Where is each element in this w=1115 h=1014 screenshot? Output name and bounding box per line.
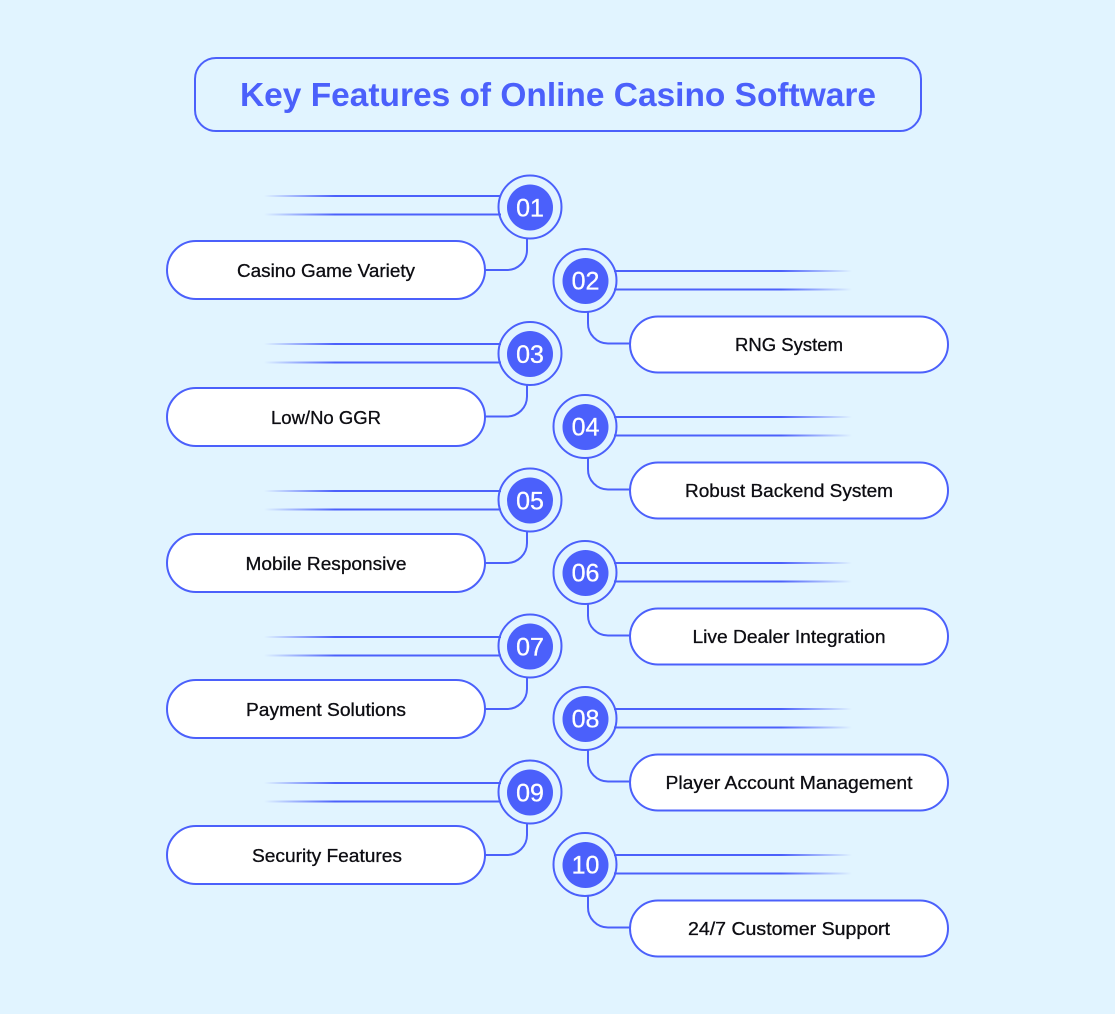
badge 07 — [498, 614, 562, 678]
badge 10 — [554, 833, 616, 896]
speed lines 02 — [614, 270, 852, 290]
feature 09 — [167, 760, 562, 884]
label 05 — [167, 534, 485, 592]
badge 03 — [498, 322, 562, 385]
badge 05: 05 — [516, 488, 544, 516]
badge 08 — [554, 687, 616, 750]
label 05: Mobile Responsive — [246, 554, 406, 574]
speed lines 09 — [264, 782, 501, 802]
label 01: Casino Game Variety — [237, 261, 415, 281]
label 10 — [630, 900, 948, 956]
feature 08 — [554, 687, 948, 810]
label 08: Player Account Management — [666, 773, 912, 793]
badge 09 — [498, 760, 562, 824]
label 09 — [167, 826, 485, 884]
label 02: RNG System — [735, 335, 843, 355]
connector 09 — [485, 824, 527, 855]
connector 02 — [588, 312, 630, 344]
feature 04 — [554, 395, 948, 518]
label 08 — [630, 754, 948, 810]
feature 07 — [167, 614, 562, 738]
label 07 — [167, 680, 485, 738]
feature 10 — [554, 833, 948, 956]
badge 02: 02 — [572, 268, 599, 296]
label 06: Live Dealer Integration — [692, 627, 886, 647]
connector 03 — [485, 386, 527, 416]
badge 04: 04 — [572, 414, 599, 442]
connector 06 — [588, 604, 630, 636]
feature 02 — [554, 249, 948, 372]
title — [195, 58, 921, 131]
speed lines 01 — [264, 195, 501, 216]
speed lines 10 — [614, 854, 852, 874]
connector 07 — [485, 678, 527, 709]
label 06 — [630, 608, 948, 664]
badge 02 — [554, 249, 616, 312]
badge 07: 07 — [516, 634, 544, 662]
label 10: 24/7 Customer Support — [688, 919, 890, 939]
label 02 — [630, 316, 948, 372]
label 01 — [167, 241, 485, 299]
badge 09: 09 — [516, 780, 544, 808]
label 07: Payment Solutions — [246, 700, 406, 720]
connector 01 — [485, 239, 527, 270]
feature 06 — [554, 541, 948, 664]
badge 01 — [498, 176, 562, 238]
badge 10: 10 — [572, 852, 599, 880]
connector 08 — [588, 750, 630, 782]
label 03 — [167, 388, 485, 446]
badge 01: 01 — [516, 194, 544, 222]
speed lines 06 — [614, 562, 852, 582]
label 03: Low/No GGR — [271, 408, 381, 428]
connector 10 — [588, 896, 630, 928]
speed lines 03 — [264, 343, 501, 364]
label 04: Robust Backend System — [685, 481, 893, 501]
speed lines 07 — [264, 636, 501, 656]
badge 08: 08 — [572, 706, 599, 734]
feature 01 — [167, 176, 562, 299]
label 09: Security Features — [252, 846, 402, 866]
speed lines 04 — [614, 416, 852, 436]
label 04 — [630, 462, 948, 518]
feature 03 — [167, 322, 562, 446]
badge 06: 06 — [572, 560, 599, 588]
speed lines 05 — [264, 490, 501, 510]
badge 03: 03 — [516, 341, 544, 369]
badge 06 — [554, 541, 616, 604]
badge 05 — [498, 468, 562, 532]
connector 04 — [588, 458, 630, 490]
speed lines 08 — [614, 708, 852, 728]
connector 05 — [485, 532, 527, 563]
title: Key Features of Online Casino Software — [240, 76, 876, 113]
feature 05 — [167, 468, 562, 592]
badge 04 — [554, 395, 616, 458]
